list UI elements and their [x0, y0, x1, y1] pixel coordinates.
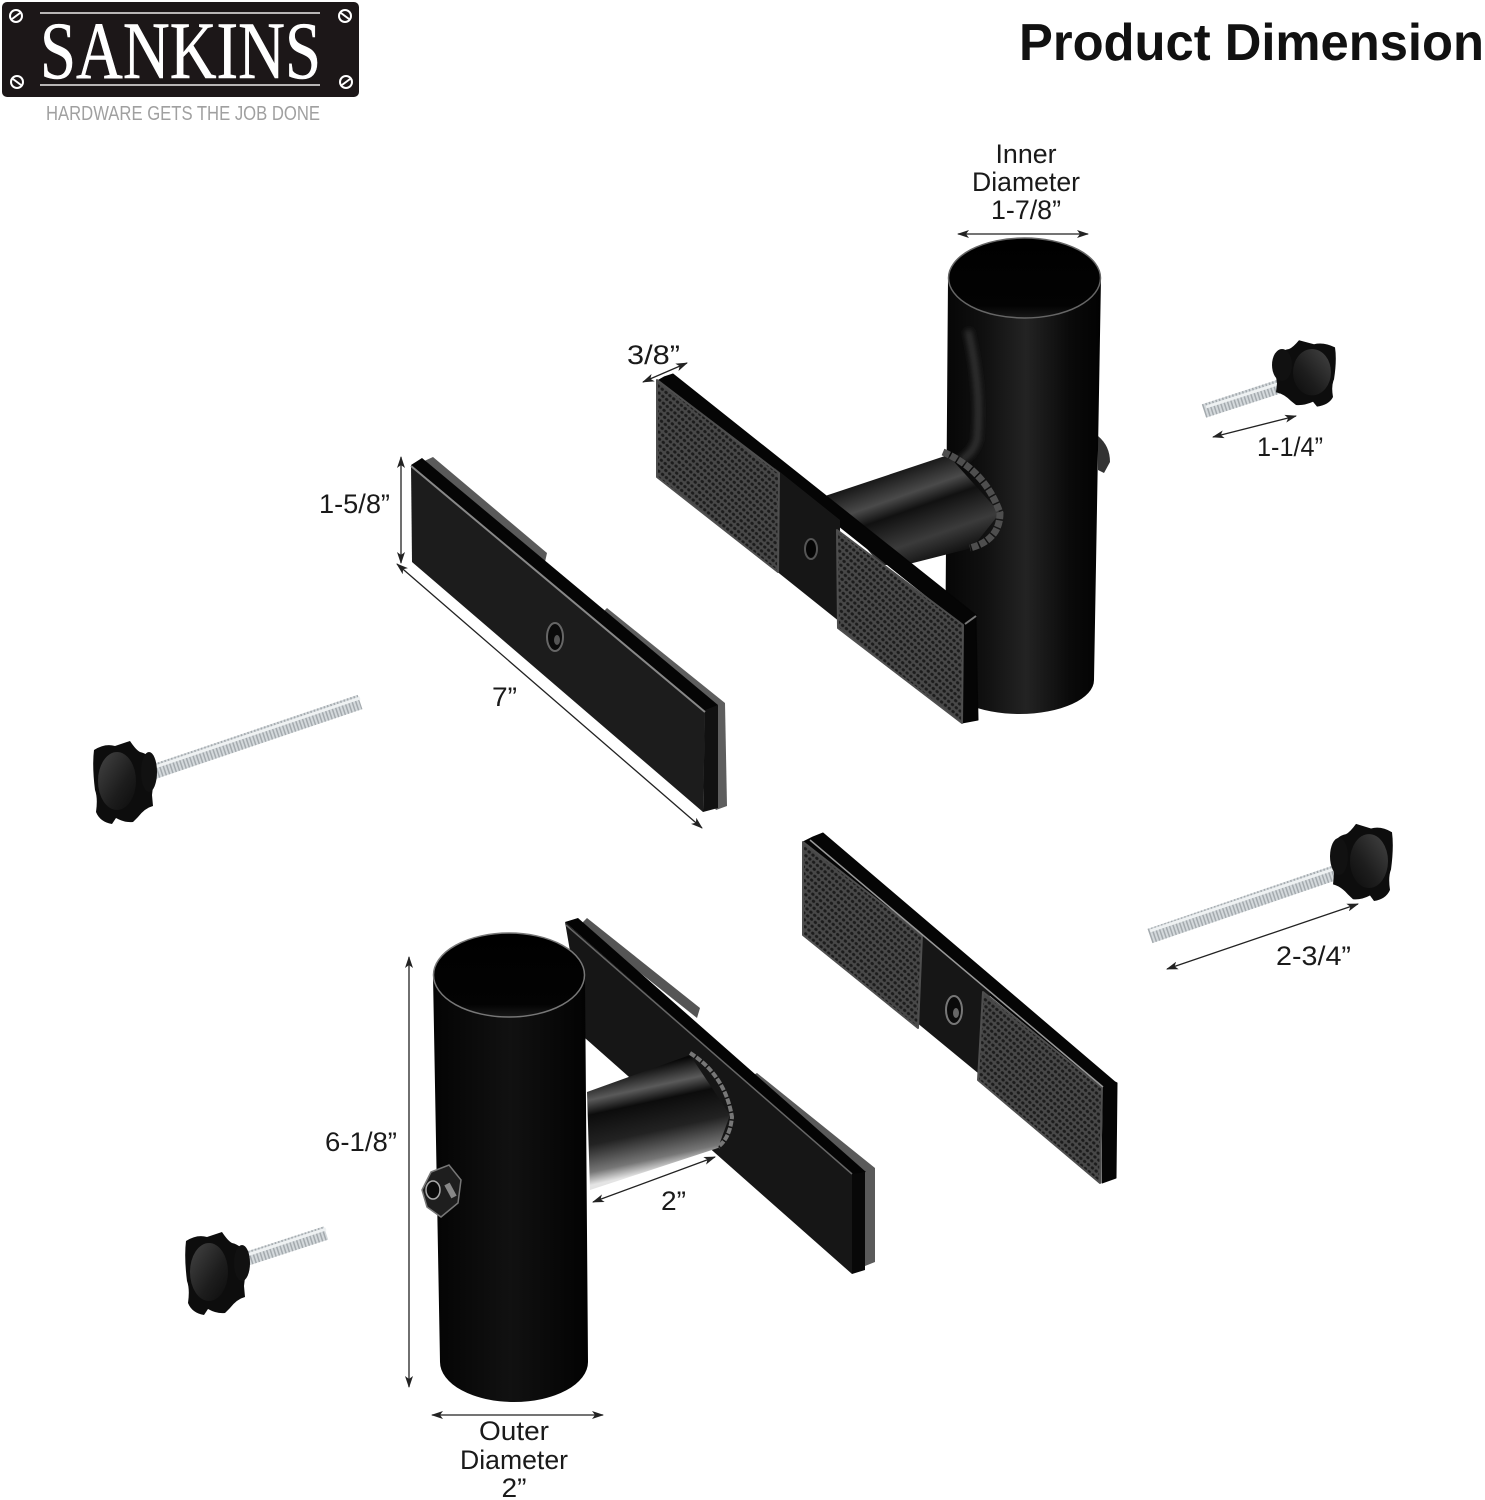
plate corner highlight	[965, 616, 976, 624]
knob	[1330, 824, 1393, 901]
knob	[185, 1232, 250, 1315]
arrow: 2-3/4	[1167, 904, 1358, 969]
loose plate with knob side facing	[411, 457, 727, 812]
face	[411, 465, 705, 812]
hole	[946, 996, 962, 1024]
hole	[547, 623, 563, 651]
thread	[1150, 867, 1340, 936]
label: inner diameter: 1-7/8”	[991, 195, 1061, 225]
logo wordmark: SANKINS	[40, 5, 321, 96]
arm	[825, 455, 1000, 565]
label: 6-1/8: 6-1/8”	[325, 1127, 397, 1157]
arrow: 2	[593, 1157, 715, 1202]
arrow: 1-1/4	[1213, 416, 1296, 437]
label: outer diameter: Outer	[479, 1416, 549, 1446]
knob	[1272, 340, 1336, 407]
top bolt	[1204, 340, 1336, 411]
centre	[916, 928, 990, 1078]
arrow: outer diameter	[432, 1414, 603, 1416]
knob	[93, 741, 157, 824]
nub on far side of tube	[1098, 436, 1110, 473]
right long bolt	[1150, 824, 1393, 936]
plate end	[852, 1172, 865, 1274]
knurled pad right	[837, 530, 963, 723]
tube opening	[434, 933, 584, 1017]
label: inner diameter: Inner	[996, 139, 1057, 169]
bottom bracket assembly	[422, 918, 875, 1402]
weld	[943, 452, 1000, 548]
tube opening	[948, 238, 1100, 318]
top bracket assembly	[657, 238, 1110, 723]
plate top edge	[565, 918, 866, 1174]
logo bottom rule	[40, 84, 320, 86]
arrow: inner diameter	[958, 233, 1088, 235]
plate highlight	[566, 925, 852, 1174]
light edge line	[810, 840, 1103, 1087]
plate centre	[775, 468, 840, 622]
top edge	[411, 458, 718, 712]
label: 2-3/4: 2-3/4”	[1276, 941, 1351, 971]
logo screws	[10, 10, 352, 88]
arrow: 6-1/8	[408, 957, 410, 1387]
nut highlight	[447, 1184, 454, 1197]
title: Product Dimension	[1019, 14, 1484, 72]
nut	[422, 1165, 461, 1217]
label: 1-1/4: 1-1/4”	[1257, 432, 1323, 462]
arrow: 3/8	[643, 363, 687, 382]
label: 1-5/8: 1-5/8”	[319, 489, 390, 519]
label: outer diameter	[460, 1416, 568, 1500]
tagline: HARDWARE GETS THE JOB DONE	[46, 103, 320, 125]
label: inner diameter	[972, 139, 1080, 225]
arm	[587, 1055, 730, 1190]
thread	[150, 698, 360, 773]
logo top rule	[40, 12, 320, 14]
knurled pad left	[803, 842, 922, 1028]
label: inner diameter: Diameter	[972, 167, 1080, 197]
plate edge	[657, 374, 978, 723]
tube	[433, 975, 588, 1402]
bottom bolt	[185, 1229, 326, 1315]
nut body	[422, 1165, 461, 1217]
dimension arrows	[397, 234, 1358, 1415]
label: 7: 7”	[492, 682, 517, 712]
logo plate	[2, 2, 359, 97]
edge	[803, 833, 1117, 1183]
grey pads behind	[422, 457, 547, 562]
knurled pad right	[978, 992, 1102, 1183]
plate face	[565, 922, 852, 1274]
arrow: 1-5/8	[400, 457, 402, 563]
tube	[945, 278, 1101, 714]
logo: SANKINS	[2, 2, 359, 97]
right plate	[803, 833, 1117, 1183]
knurled pad left	[657, 380, 779, 572]
highlight line	[411, 466, 705, 712]
left long bolt	[93, 698, 360, 824]
label: outer diameter: Diameter	[460, 1445, 568, 1475]
grey pads behind	[580, 918, 700, 1018]
thread	[240, 1229, 326, 1261]
nut bore	[426, 1181, 440, 1199]
weld	[690, 1053, 732, 1147]
arrow: 7	[397, 564, 702, 828]
tube crease highlight	[960, 330, 978, 460]
label: 3/8: 3/8”	[627, 340, 680, 370]
thread	[1204, 382, 1284, 411]
mounting hole	[805, 539, 817, 559]
label: 2: 2”	[661, 1186, 686, 1216]
end	[703, 705, 718, 812]
